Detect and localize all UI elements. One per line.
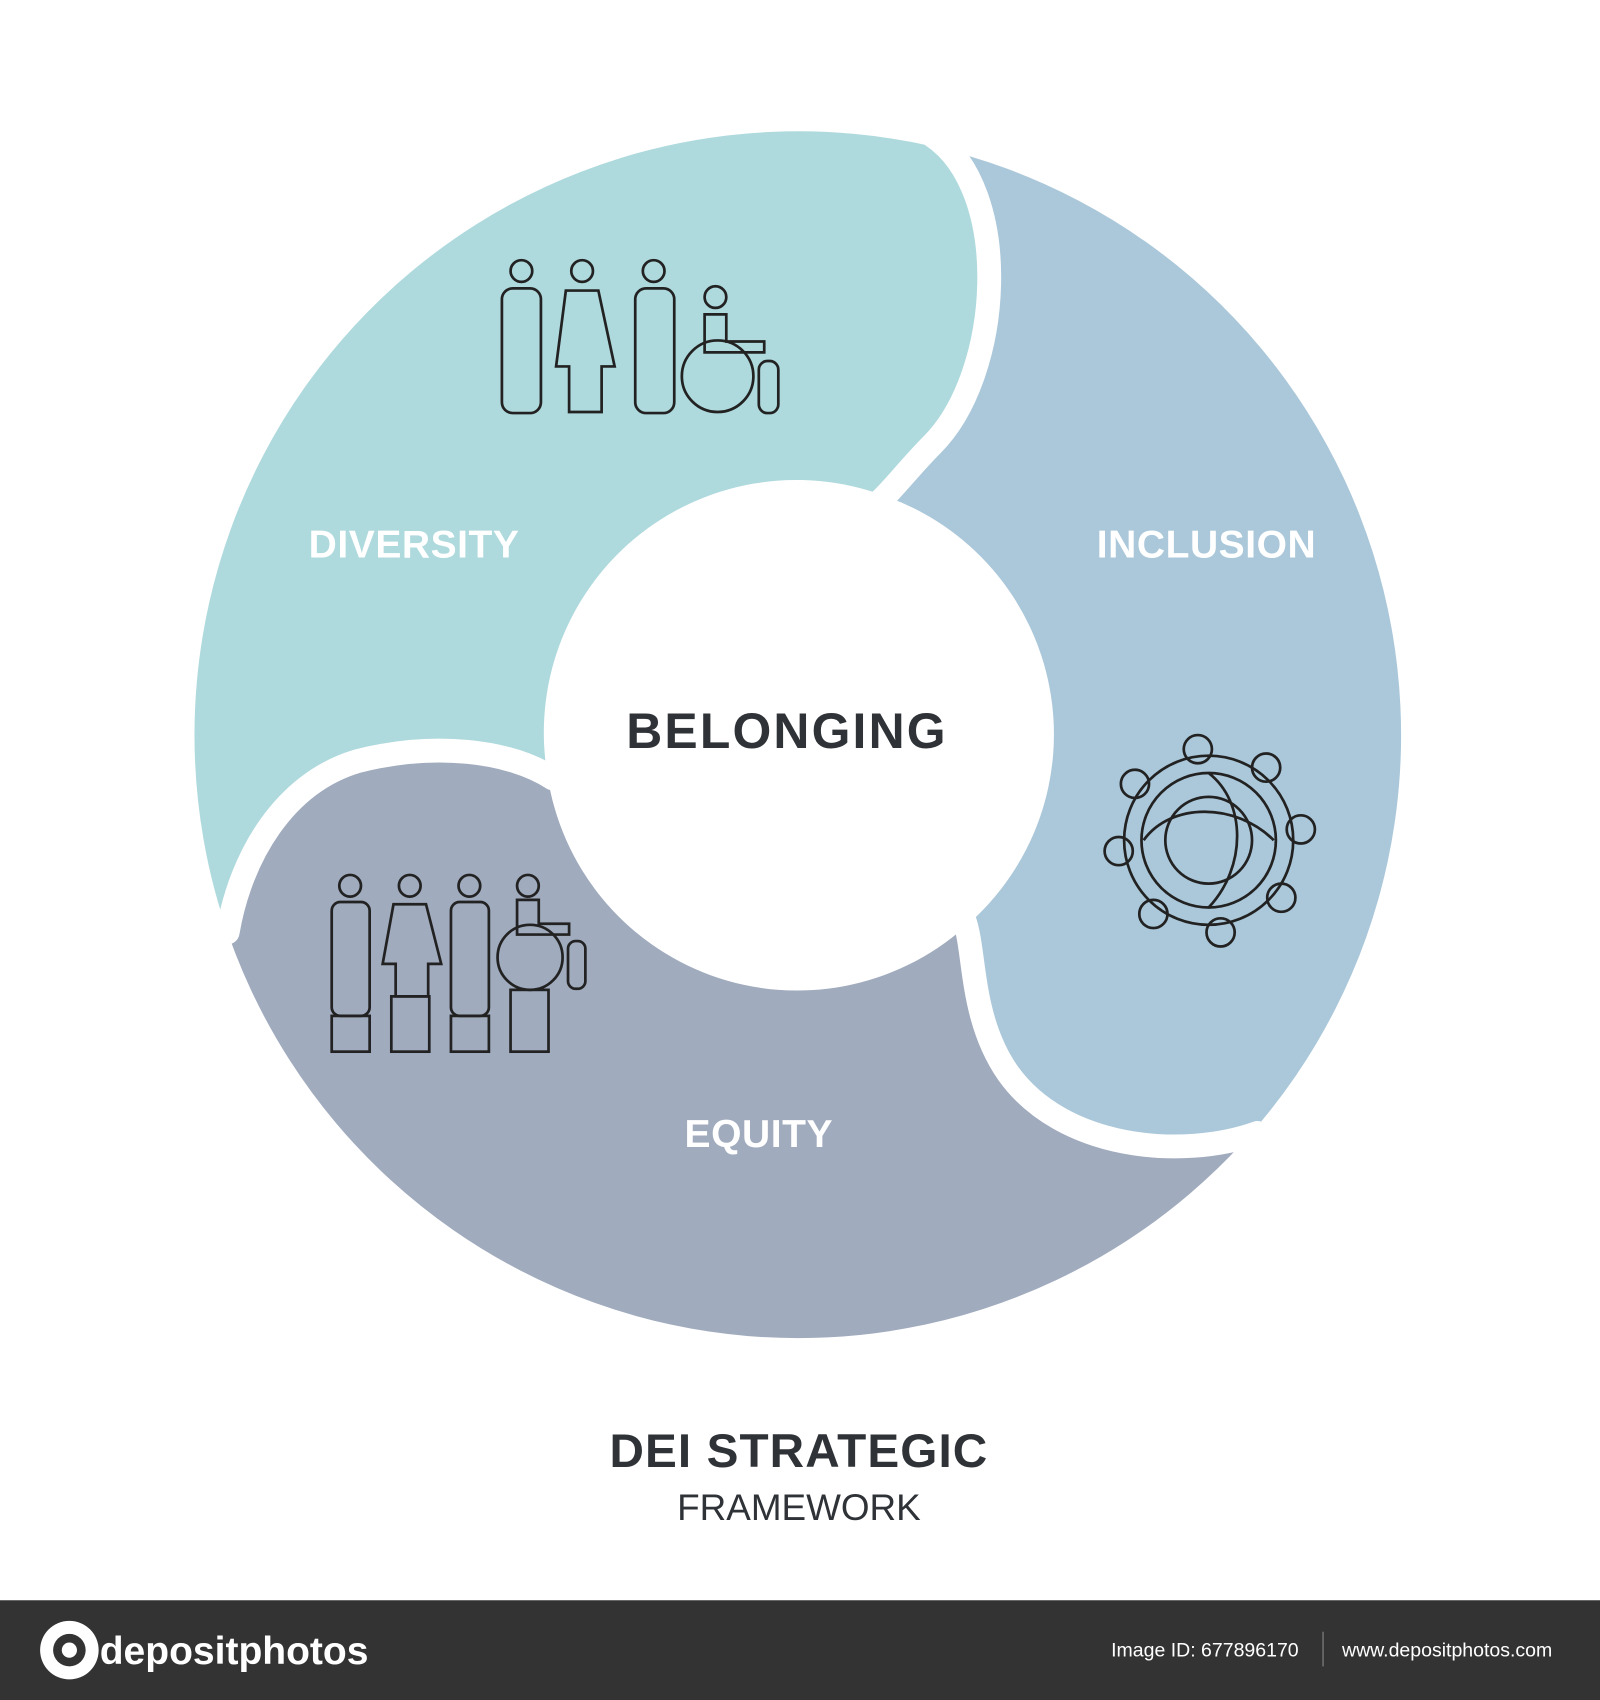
title: DEI STRATEGIC (610, 1425, 988, 1478)
title: FRAMEWORK (677, 1487, 921, 1528)
footer bar: www.depositphotos.com (1341, 1640, 1552, 1662)
segment: inclusion (883, 146, 1401, 1148)
icon: diversity people (502, 260, 778, 413)
segment: equity (222, 747, 1247, 1338)
label: equity: EQUITY (685, 1113, 833, 1156)
label: inclusion: INCLUSION (1097, 523, 1316, 566)
segment: diversity (194, 131, 989, 916)
footer bar: Image ID: 677896170 (1111, 1640, 1299, 1662)
footer bar (0, 1600, 1600, 1700)
center circle (546, 481, 1051, 987)
label: diversity: DIVERSITY (309, 523, 520, 566)
center label: belonging: BELONGING (626, 703, 948, 759)
icon: inclusion circle of people (1105, 735, 1315, 946)
cycle diagram (194, 131, 1401, 1338)
icon: equity people on boxes (332, 875, 585, 1052)
footer bar: depositphotos (100, 1630, 368, 1673)
title (610, 1425, 988, 1528)
